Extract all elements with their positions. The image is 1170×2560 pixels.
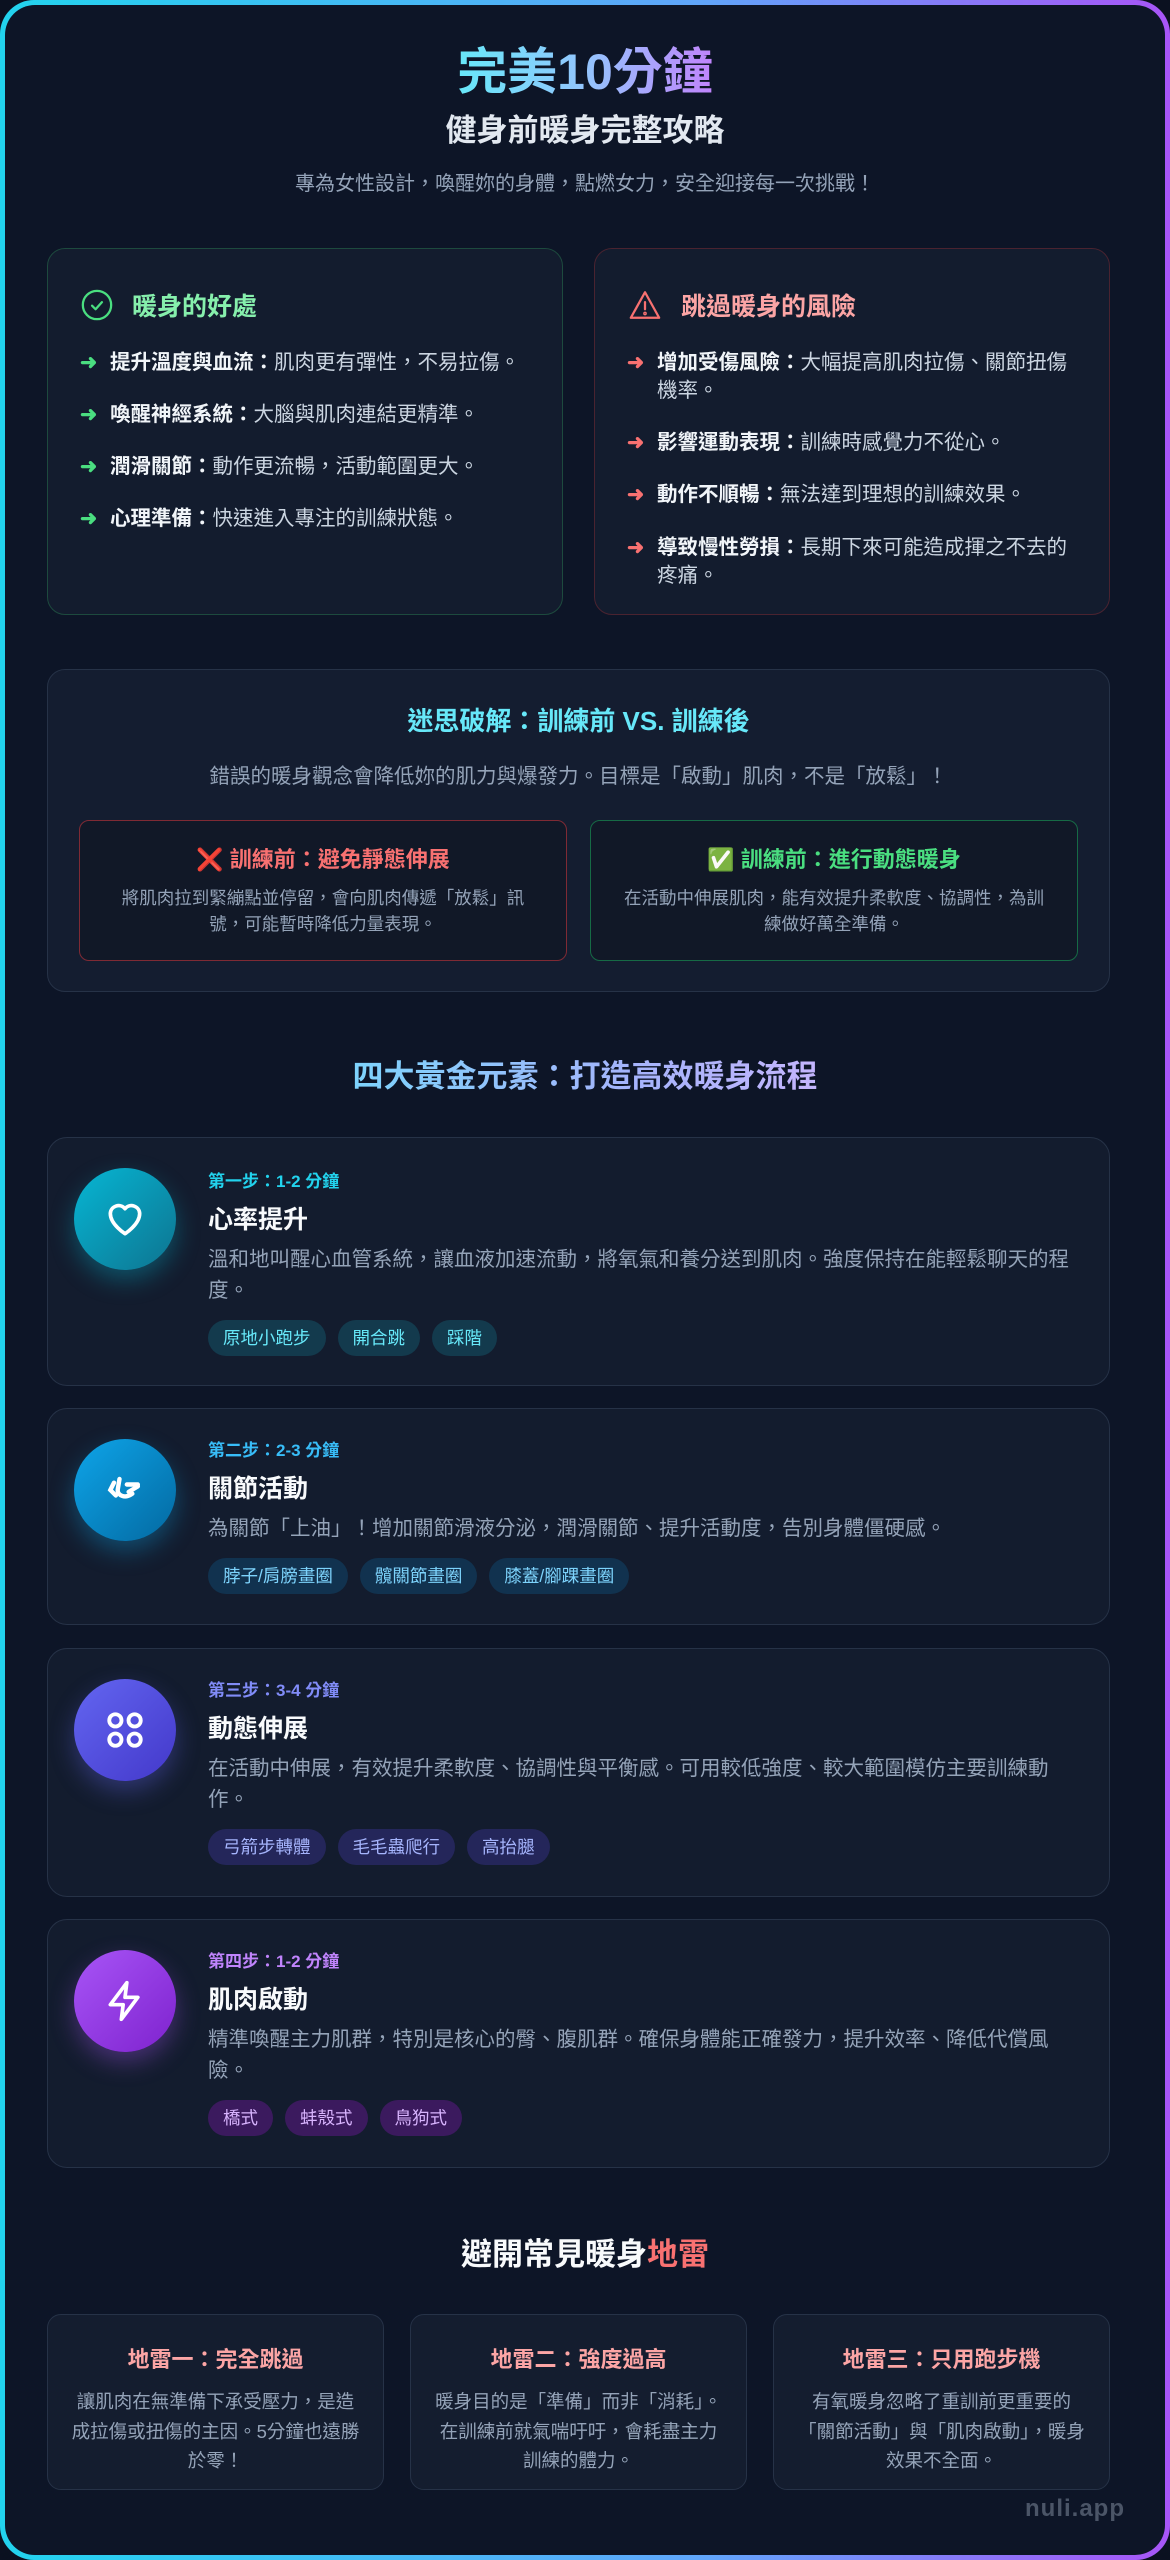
box: do dynamic warmup: ✅ 訓練前：進行動態暖身 xyxy=(707,847,961,872)
step card 2 xyxy=(47,1408,1110,1625)
step 1 text: 踩階 xyxy=(447,1328,482,1348)
risk item 3: 動作不順暢：無法達到理想的訓練效果。 xyxy=(657,483,1026,506)
landmine 3: 有氧暖身忽略了重訓前更重要的「關節活動」與「肌肉啟動」，暖身效果不全面。 xyxy=(798,2391,1085,2471)
risk item 4: 疼痛。 xyxy=(657,564,718,587)
benefits heading xyxy=(82,290,257,321)
landmine 3 xyxy=(773,2314,1110,2490)
risk item 1: 機率。 xyxy=(657,379,718,402)
step 3 text: 第三步：3-4 分鐘 xyxy=(208,1681,339,1700)
box: avoid static stretching: ❌ 訓練前：避免靜態伸展 xyxy=(196,847,450,872)
icon: check circle xyxy=(82,290,112,320)
step 3 text: 弓箭步轉體 xyxy=(223,1837,310,1857)
risk item 2: ➜ xyxy=(627,431,644,454)
icon: joint xyxy=(74,1439,176,1541)
box: do dynamic warmup: 練做好萬全準備。 xyxy=(764,914,904,934)
risk item 4: 導致慢性勞損：長期下來可能造成揮之不去的 xyxy=(657,536,1067,559)
benefit item 2: 喚醒神經系統：大腦與肌肉連結更精準。 xyxy=(110,403,479,426)
step 4 text xyxy=(208,1952,1048,2136)
benefit item 1: ➜ xyxy=(80,351,97,374)
icon: grid xyxy=(74,1679,176,1781)
risk item 1: 增加受傷風險：大幅提高肌肉拉傷、關節扭傷 xyxy=(657,351,1067,374)
section heading: four elements: 四大黃金元素：打造高效暖身流程 xyxy=(352,1059,818,1094)
landmine 1: 讓肌肉在無準備下承受壓力，是造成拉傷或扭傷的主因。5分鐘也遠勝於零！ xyxy=(72,2391,359,2471)
watermark: nuli.app xyxy=(1025,2495,1125,2522)
landmine 1: 地雷一：完全跳過 xyxy=(127,2347,304,2372)
panel: myth busting xyxy=(47,669,1110,992)
benefits heading: 暖身的好處 xyxy=(132,293,257,321)
step 1 text: 溫和地叫醒心血管系統，讓血液加速流動，將氧氣和養分送到肌肉。強度保持在能輕鬆聊天的程度。 xyxy=(208,1248,1069,1302)
risks heading: 跳過暖身的風險 xyxy=(681,293,856,321)
box: avoid static stretching xyxy=(79,820,567,961)
step 1 text xyxy=(208,1172,1069,1356)
step 2 text: 膝蓋/腳踝畫圈 xyxy=(504,1566,614,1586)
landmine 2: 暖身目的是「準備」而非「消耗」。在訓練前就氣喘吁吁，會耗盡主力訓練的體力。 xyxy=(435,2391,722,2471)
panel: risks xyxy=(594,248,1110,615)
step 3 text: 動態伸展 xyxy=(208,1715,308,1743)
benefit item 2: ➜ xyxy=(80,403,97,426)
subtitle: 健身前暖身完整攻略 xyxy=(446,113,724,148)
step 1 text: 第一步：1-2 分鐘 xyxy=(208,1172,339,1191)
step 2 text: 髖關節畫圈 xyxy=(375,1566,462,1586)
step 2 text: 關節活動 xyxy=(208,1475,308,1503)
risk item 2: 影響運動表現：訓練時感覺力不從心。 xyxy=(657,431,1006,454)
risk item 4 xyxy=(627,536,1067,587)
panel: benefits xyxy=(47,248,563,615)
step 2 text: 為關節「上油」！增加關節滑液分泌，潤滑關節、提升活動度，告別身體僵硬感。 xyxy=(208,1517,946,1540)
step 1 text: 心率提升 xyxy=(208,1206,308,1234)
icon: heart xyxy=(74,1168,176,1270)
step 2 text: 脖子/肩膀畫圈 xyxy=(223,1566,333,1586)
section heading: landmines: 避開常見暖身地雷 xyxy=(461,2237,709,2272)
risk item 1: ➜ xyxy=(627,351,644,374)
benefit item 1: 提升溫度與血流：肌肉更有彈性，不易拉傷。 xyxy=(110,351,520,374)
step 4 text: 肌肉啟動 xyxy=(208,1986,308,2014)
tagline: 專為女性設計，喚醒妳的身體，點燃女力，安全迎接每一次挑戰！ xyxy=(295,173,875,195)
step 4 text: 鳥狗式 xyxy=(394,2108,447,2128)
step 3 text xyxy=(208,1681,1048,1865)
step card 3 xyxy=(47,1648,1110,1897)
step 3 text: 高抬腿 xyxy=(482,1837,534,1857)
icon: lightning xyxy=(74,1950,176,2052)
step 2 text: 第二步：2-3 分鐘 xyxy=(208,1441,339,1460)
risk item 1 xyxy=(627,351,1067,402)
step 4 text: 蚌殼式 xyxy=(300,2108,352,2128)
landmine 2 xyxy=(410,2314,747,2490)
icon: warning triangle xyxy=(630,291,660,319)
box: avoid static stretching: 將肌肉拉到緊繃點並停留，會向肌肉傳遞「放鬆」訊號，可能暫時降低力量表現。 xyxy=(122,888,524,934)
benefit item 4: ➜ xyxy=(80,507,97,530)
step 4 text: 精準喚醒主力肌群，特別是核心的臀、腹肌群。確保身體能正確發力，提升效率、降低代償風險。 xyxy=(208,2028,1048,2082)
box: do dynamic warmup: 在活動中伸展肌肉，能有效提升柔軟度、協調性，為訓 xyxy=(624,888,1044,908)
step 2 text xyxy=(208,1441,946,1594)
step card 4 xyxy=(47,1919,1110,2168)
benefit item 3: ➜ xyxy=(80,455,97,478)
step 1 text: 開合跳 xyxy=(352,1328,405,1348)
risk item 4: ➜ xyxy=(627,536,644,559)
benefit item 3: 潤滑關節：動作更流暢，活動範圍更大。 xyxy=(110,455,479,478)
step 4 text: 第四步：1-2 分鐘 xyxy=(208,1952,339,1971)
box: do dynamic warmup xyxy=(590,820,1078,961)
landmine 2: 地雷二：強度過高 xyxy=(490,2347,666,2372)
landmine 3: 地雷三：只用跑步機 xyxy=(842,2347,1040,2372)
title: 完美10分鐘 xyxy=(457,44,713,100)
step card 1 xyxy=(47,1137,1110,1386)
benefit item 4: 心理準備：快速進入專注的訓練狀態。 xyxy=(110,507,458,530)
step 1 text: 原地小跑步 xyxy=(223,1328,310,1348)
step 3 text: 在活動中伸展，有效提升柔軟度、協調性與平衡感。可用較低強度、較大範圍模仿主要訓練動作。 xyxy=(208,1757,1048,1811)
step 4 text: 橋式 xyxy=(223,2108,258,2128)
step 3 text: 毛毛蟲爬行 xyxy=(352,1837,440,1857)
risk item 3: ➜ xyxy=(627,483,644,506)
myth intro: 錯誤的暖身觀念會降低妳的肌力與爆發力。目標是「啟動」肌肉，不是「放鬆」！ xyxy=(210,765,948,788)
landmine 1 xyxy=(47,2314,384,2490)
myth heading: 迷思破解：訓練前 VS. 訓練後 xyxy=(407,706,750,736)
